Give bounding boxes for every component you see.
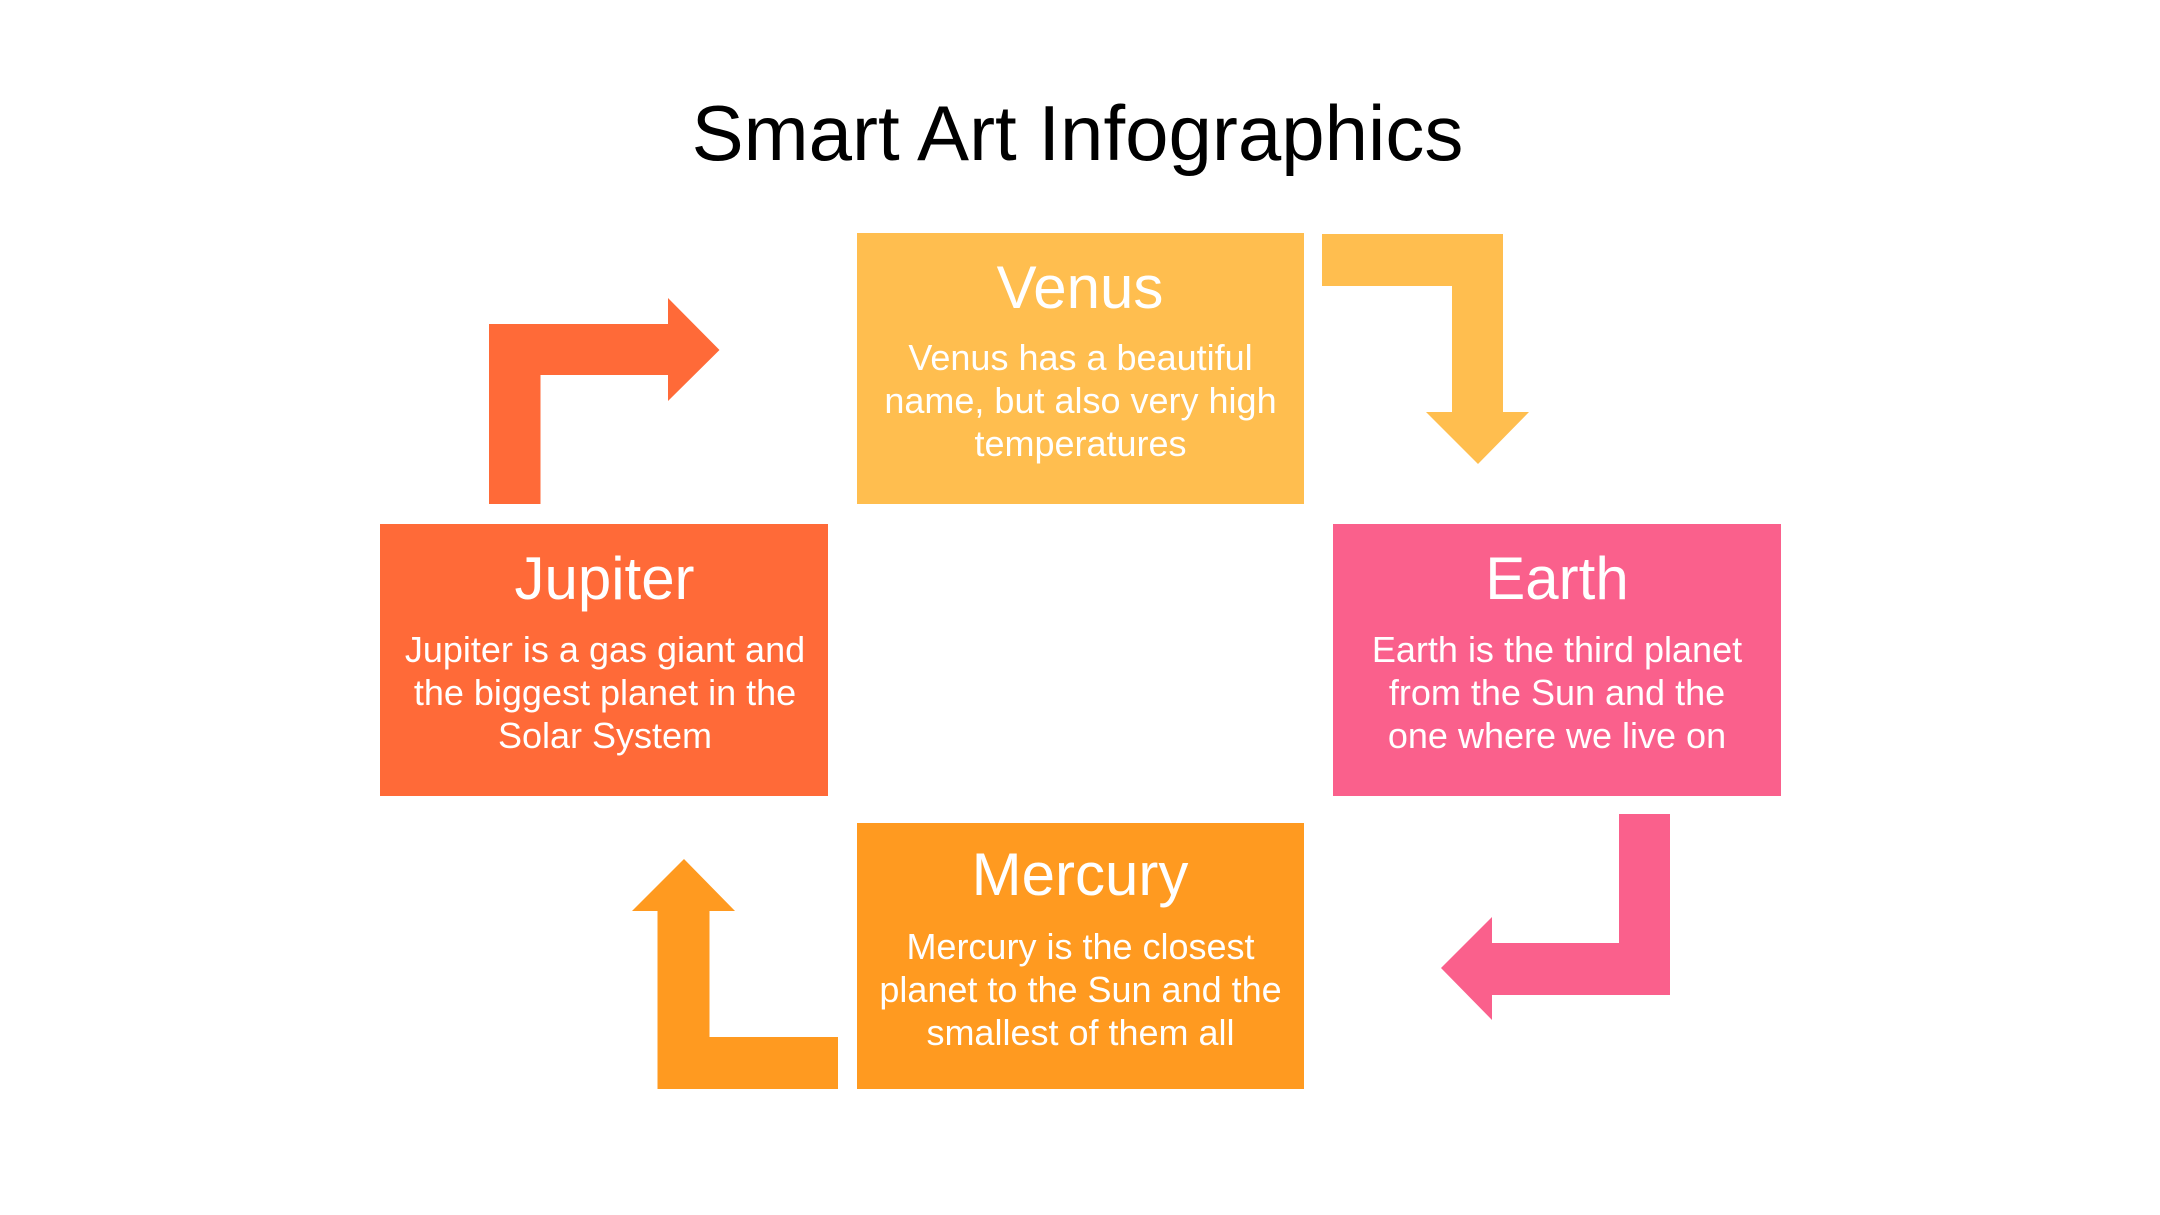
text: Venus description: name, but also very high [884,380,1277,421]
text: Venus description: Venus has a beautiful [908,337,1253,378]
panel: Mercury [857,823,1304,1089]
text: Mercury description: planet to the Sun and the [879,969,1282,1010]
text: Jupiter description: Jupiter is a gas giant and [405,629,805,670]
heading: Jupiter: Jupiter [514,545,695,612]
text: Venus description [884,337,1277,464]
panel: Jupiter [380,524,828,796]
text: Jupiter description: Solar System [498,715,712,756]
panel: Venus [857,233,1304,504]
text: Mercury description: Mercury is the closest [906,926,1255,967]
text: Jupiter description: the biggest planet in the [414,672,796,713]
text: Earth description [1372,629,1742,756]
arrow: Mercury to Jupiter [632,859,838,1089]
arrow: Venus to Earth [1322,234,1529,464]
text: Jupiter description [405,629,805,756]
arrow: Earth to Mercury [1441,814,1670,1020]
text: Earth description: Earth is the third planet [1372,629,1742,670]
text: Venus description: temperatures [974,423,1187,464]
heading: Venus: Venus [997,254,1163,321]
heading: Earth: Earth [1485,545,1629,612]
text: Mercury description: smallest of them all [926,1012,1235,1053]
text: Mercury description [879,926,1282,1053]
text: Earth description: from the Sun and the [1389,672,1725,713]
arrow: Jupiter to Venus [489,298,720,504]
heading: Mercury: Mercury [972,841,1188,908]
text: Earth description: one where we live on [1388,715,1726,756]
panel: Earth [1333,524,1781,796]
title: Smart Art Infographics [692,89,1463,177]
